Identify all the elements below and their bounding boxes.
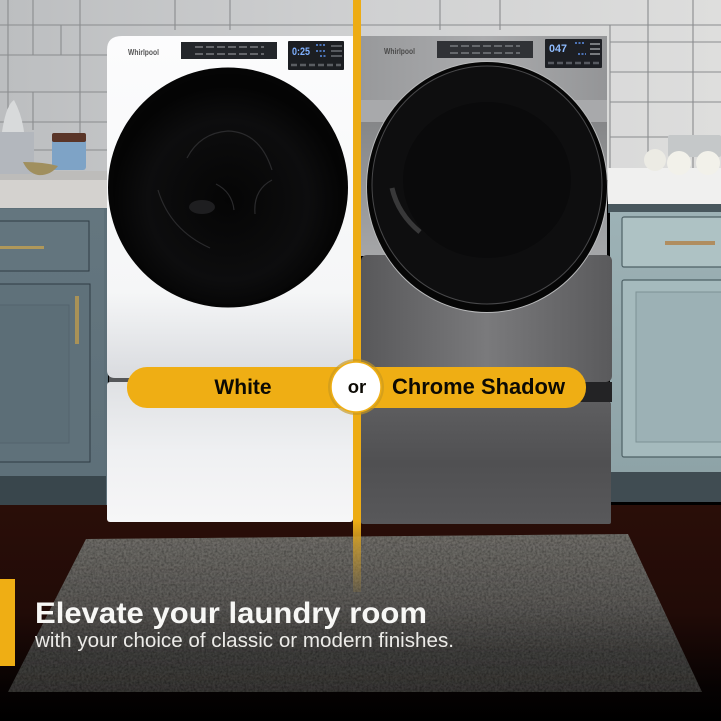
right cabinet and countertop: [608, 168, 721, 502]
dryer: chrome shadow: [361, 36, 612, 524]
display: white washer: [288, 41, 344, 70]
display: white washer: 0:25: [292, 46, 310, 58]
door: chrome dryer: [366, 61, 608, 313]
floor: [0, 505, 721, 721]
center divider line: [353, 0, 361, 592]
label: chrome shadow: Chrome Shadow: [392, 374, 566, 399]
left cabinet and countertop: [0, 171, 108, 508]
countertop decor: balls and basket: [644, 135, 721, 175]
or badge: [328, 359, 384, 415]
display: chrome dryer: 047: [549, 43, 567, 55]
whirlpool logo: chrome dryer: Whirlpool: [384, 46, 415, 56]
yellow accent bar: [0, 579, 15, 666]
rug: [8, 534, 702, 692]
control panel: white washer: [181, 42, 277, 59]
washer: white: [107, 36, 353, 522]
or badge: or: [348, 376, 366, 397]
subheadline: with your choice of classic or modern finishes.: [34, 630, 454, 652]
door: white washer: [108, 68, 348, 308]
control panel: chrome dryer: [437, 41, 533, 58]
color selector pill: [127, 359, 586, 415]
background wall: [0, 0, 721, 180]
countertop decor: tissue box, jar, dish: [0, 100, 86, 175]
whirlpool logo: white washer: Whirlpool: [128, 47, 159, 57]
headline: Elevate your laundry room: [35, 597, 427, 630]
label: white: White: [214, 376, 272, 399]
display: chrome dryer: [545, 39, 602, 68]
